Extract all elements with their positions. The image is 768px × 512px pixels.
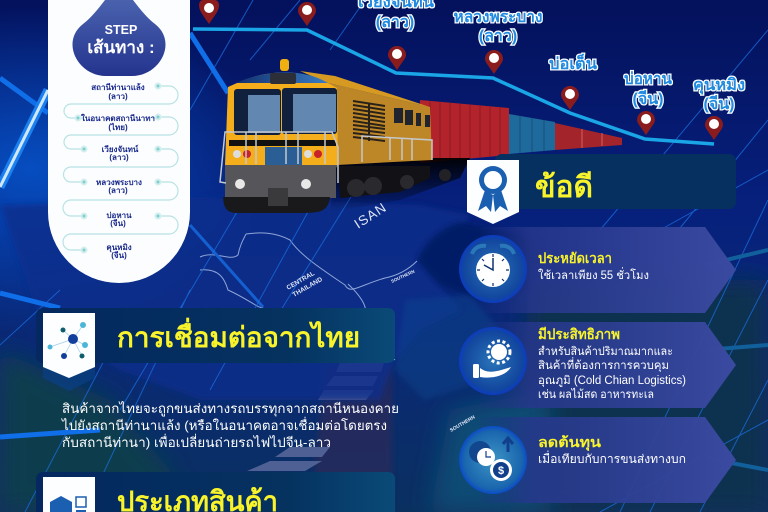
panel: connection from Thailand <box>36 308 395 391</box>
label: Mohan: บ่อหาน <box>624 71 672 88</box>
train <box>220 59 622 213</box>
shadow and bogies <box>330 158 470 212</box>
card: lower cost <box>459 417 736 503</box>
body <box>538 345 686 401</box>
heading: STEP: STEP <box>105 23 137 37</box>
heading: advantages: ข้อดี <box>535 171 593 204</box>
step 1 <box>91 82 145 101</box>
body: เมื่อเทียบกับการขนส่งทางบก <box>538 450 686 466</box>
icon: clock <box>459 235 527 303</box>
label: Boten: บ่อเต็น <box>549 52 597 73</box>
step 6: คุนหมิง <box>106 243 132 253</box>
label: Luang Prabang: หลวงพระบาง <box>454 9 542 26</box>
title: ลดต้นทุน <box>538 434 601 451</box>
panel: advantages heading <box>467 154 736 224</box>
pin: Kunming <box>705 116 723 140</box>
card: efficiency <box>459 322 736 408</box>
map label: ISAN: ISAN <box>351 200 389 232</box>
container wagons <box>420 100 622 163</box>
label: Luang Prabang country: (ลาว) <box>479 28 517 45</box>
icon: cost: $ <box>498 465 504 477</box>
title: มีประสิทธิภาพ <box>538 326 620 342</box>
step 5 <box>106 211 132 228</box>
text: connection description: สินค้าจากไทยจะถูกขนส่งทางรถบรรทุกจากสถานีหนองคาย <box>62 401 399 417</box>
pin: station 1 <box>199 0 219 24</box>
label: Vientiane country: (ลาว) <box>376 14 414 31</box>
body: อุณภูมิ (Cold Chian Logistics) <box>538 374 686 387</box>
icon: gear in hand <box>459 327 527 395</box>
map label: central Thailand: CENTRAL <box>286 270 316 292</box>
step 6: (จีน) <box>111 250 127 260</box>
map label: southern Thailand: SOUTHERN <box>390 269 415 284</box>
text: connection description: กับสถานีท่านา) เพื่อเปลี่ยนถ่ายรถไฟไปจีน-ลาว <box>62 434 331 450</box>
heading: การเชื่อมต่อจากไทย <box>117 317 360 353</box>
panel: route steps <box>48 0 190 283</box>
step 4: หลวงพระบาง <box>96 178 142 187</box>
step 1: สถานีท่านาแล้ง <box>91 82 145 92</box>
icon: drop heading <box>72 0 166 76</box>
pin: station 2 <box>298 2 316 26</box>
card: save time <box>459 227 736 313</box>
heading: route: เส้นทาง : <box>87 38 155 57</box>
map label: central Thailand line 2: THAILAND <box>292 276 324 299</box>
icon: network badge <box>43 313 95 378</box>
body: ใช้เวลาเพียง 55 ชั่วโมง <box>538 267 649 282</box>
label: Kunming country: (จีน) <box>704 94 734 113</box>
icon: ribbon badge <box>467 160 519 224</box>
map label: southern Thailand on card: SOUTHERN <box>449 414 477 434</box>
step 6 <box>106 243 132 260</box>
pin: Vientiane <box>388 46 406 70</box>
pin: Luang Prabang <box>485 50 503 74</box>
icon: boxes badge <box>43 477 95 512</box>
pin: Mohan <box>637 111 655 135</box>
text: connection description: ไปยังสถานีท่านาแล้ง (หรือในอนาคตอาจเชื่อมต่อโดยตรง <box>61 417 387 433</box>
step 1: (ลาว) <box>108 92 128 101</box>
text: connection description <box>61 401 399 450</box>
step 3: (ลาว) <box>109 153 129 162</box>
body: เช่น ผลไม้สด อาหารทะเล <box>538 388 654 401</box>
step 4: (ลาว) <box>108 186 128 195</box>
step 2: ในอนาคตสถานีนาทา <box>81 113 155 123</box>
serpentine route line <box>63 86 178 250</box>
body: สินค้าที่ต้องการการควบคุม <box>538 357 669 372</box>
step 4 <box>96 178 142 195</box>
step 2 <box>81 113 155 132</box>
step 5: (จีน) <box>110 218 126 228</box>
step 2: (ไทย) <box>108 122 128 132</box>
icon: cost <box>459 426 527 494</box>
map of Thailand <box>0 197 540 400</box>
label: Kunming: คุนหมิง <box>693 76 745 95</box>
step 3: เวียงจันทน์ <box>102 144 139 154</box>
step 5: บ่อหาน <box>106 211 132 220</box>
body: สำหรับสินค้าปริมาณมากและ <box>538 345 673 358</box>
title: ประหยัดเวลา <box>538 250 612 266</box>
panel: cargo types <box>36 472 395 512</box>
route line <box>193 29 714 144</box>
pin: Boten <box>561 86 579 110</box>
label: Mohan country: (จีน) <box>633 89 663 108</box>
route dots <box>76 84 160 252</box>
step 3 <box>102 144 139 162</box>
locomotive <box>220 59 432 213</box>
railway track <box>247 363 392 512</box>
side louvres <box>353 101 385 141</box>
